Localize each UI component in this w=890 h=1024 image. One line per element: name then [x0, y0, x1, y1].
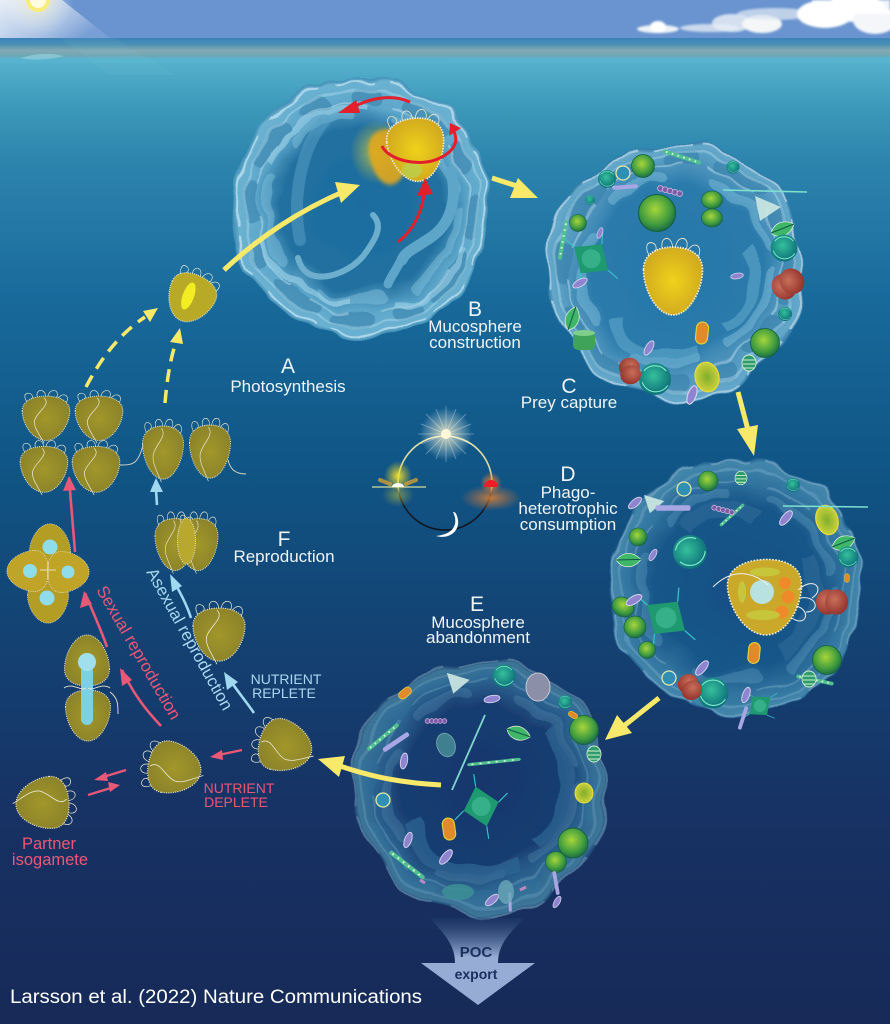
- red arrow heads: [338, 100, 461, 196]
- life-cycle small arrows: [63, 476, 254, 795]
- cell after abandonment: [247, 713, 321, 779]
- zygote with blue nucleus: [64, 635, 118, 741]
- pink arrow to tetrad: [85, 593, 107, 647]
- tetrad cell with four nuclei: [7, 524, 89, 623]
- label F: Reproduction: [233, 547, 335, 566]
- POC export arrow: [421, 918, 535, 1005]
- panel: E mucosphere abandonment: [354, 659, 608, 913]
- arrow: B to C: [492, 178, 538, 198]
- pink arrow to zygote: [122, 670, 161, 726]
- label: sexual reproduction: Sexual reproduction: [93, 582, 185, 723]
- large yellow cell in C: [644, 238, 702, 315]
- label: nutrient deplete: NUTRIENT: [204, 780, 275, 796]
- label D: consumption: [520, 515, 616, 534]
- prey organisms in D: [608, 471, 868, 730]
- export label: export: [455, 966, 498, 982]
- four daughter cells: [20, 390, 123, 495]
- ocean surface waves: [0, 38, 890, 63]
- panel: B mucosphere construction: [232, 78, 492, 338]
- arrow: C to D: [737, 392, 758, 456]
- yellow cycle arrows: [86, 178, 758, 785]
- stage labels: [230, 298, 618, 647]
- prey remains in E: [366, 664, 601, 912]
- arrow: A to B: [224, 182, 360, 270]
- prey organisms in C: [558, 149, 809, 405]
- label: asexual reproduction: Asexual reproduction: [143, 565, 237, 714]
- top bright cell: [159, 261, 225, 330]
- label B: B: [468, 298, 482, 321]
- pink arrow heads: [63, 476, 223, 792]
- crescent moon: [436, 512, 458, 537]
- yellow cell in B: [384, 107, 448, 184]
- dinoflagellate life cycle cells: [7, 261, 321, 832]
- blue arrow heads: [150, 478, 238, 690]
- mucus ribbons: [297, 120, 453, 284]
- pink arrow to four cells: [69, 478, 75, 552]
- day-night cycle diagram: [372, 406, 521, 537]
- arrow: D to E: [605, 698, 659, 740]
- label E: Mucosphere: [431, 613, 525, 632]
- label E: E: [470, 593, 484, 616]
- label E: [426, 593, 530, 647]
- mucosphere C body: [548, 142, 804, 398]
- two daughter cells: [120, 418, 246, 482]
- mucosphere E body: [354, 659, 608, 913]
- label B: construction: [429, 333, 521, 352]
- blue arrow replete to single: [228, 677, 254, 713]
- ghost cell orange halo: [350, 120, 402, 184]
- green patch at cell base: [402, 162, 422, 178]
- single cell nutrient replete: [193, 601, 245, 664]
- sunrise: [372, 461, 426, 507]
- label D: heterotrophic: [518, 499, 618, 518]
- sunset: [461, 472, 521, 511]
- ghost cell motion blur: [369, 129, 411, 185]
- sun in the sky: [0, 0, 175, 75]
- label B: Mucosphere: [428, 317, 522, 336]
- label D: D: [560, 463, 576, 486]
- label: partner isogamete: Partner: [22, 835, 77, 853]
- pink arrow to isogamete: [214, 750, 242, 756]
- sky: [0, 0, 890, 39]
- dashed arrow: sexual cells to top cell: [86, 308, 158, 387]
- label E: abandonment: [426, 628, 530, 647]
- noon sun: [418, 406, 474, 462]
- label: nutrient replete: REPLETE: [252, 685, 316, 701]
- blue arrow single to dividing: [173, 580, 191, 618]
- label: nutrient deplete: DEPLETE: [204, 794, 268, 810]
- day night orbit: [398, 436, 492, 530]
- mucosphere D body: [609, 459, 865, 715]
- blue arrow dividing to daughters: [156, 490, 157, 505]
- label C: [521, 375, 617, 412]
- pink arrow from isogamete to partner: [100, 770, 126, 778]
- nutrient deplete isogamete: [137, 737, 208, 799]
- label B: [428, 298, 522, 352]
- label D: Phago-: [541, 483, 595, 502]
- label C: Prey capture: [521, 393, 617, 412]
- label: partner isogamete: isogamete: [12, 851, 88, 869]
- label A: Photosynthesis: [230, 377, 346, 396]
- cell with ingested prey: [713, 558, 818, 637]
- arrow: E to cell: [318, 756, 441, 785]
- citation: Larsson et al. (2022) Nature Communications: [10, 987, 422, 1008]
- partner isogamete cell: [11, 774, 78, 832]
- panel: D phago-heterotrophic consumption: [608, 459, 868, 730]
- label C: C: [561, 375, 577, 398]
- label F: [233, 528, 335, 566]
- label D: [518, 463, 618, 534]
- dashed arrow: asexual cells to top cell: [165, 328, 183, 403]
- pink arrow from partner: [88, 787, 114, 795]
- panel: C prey capture: [548, 142, 809, 405]
- label A: [230, 355, 346, 396]
- POC label: POC: [460, 944, 492, 961]
- label F: F: [278, 528, 290, 551]
- red rotation arrows: [352, 98, 456, 242]
- mucosphere B body: [232, 78, 492, 338]
- clouds: [637, 0, 890, 34]
- label A: A: [281, 355, 295, 378]
- label: nutrient replete: NUTRIENT: [251, 671, 322, 687]
- dividing cell: [155, 512, 218, 574]
